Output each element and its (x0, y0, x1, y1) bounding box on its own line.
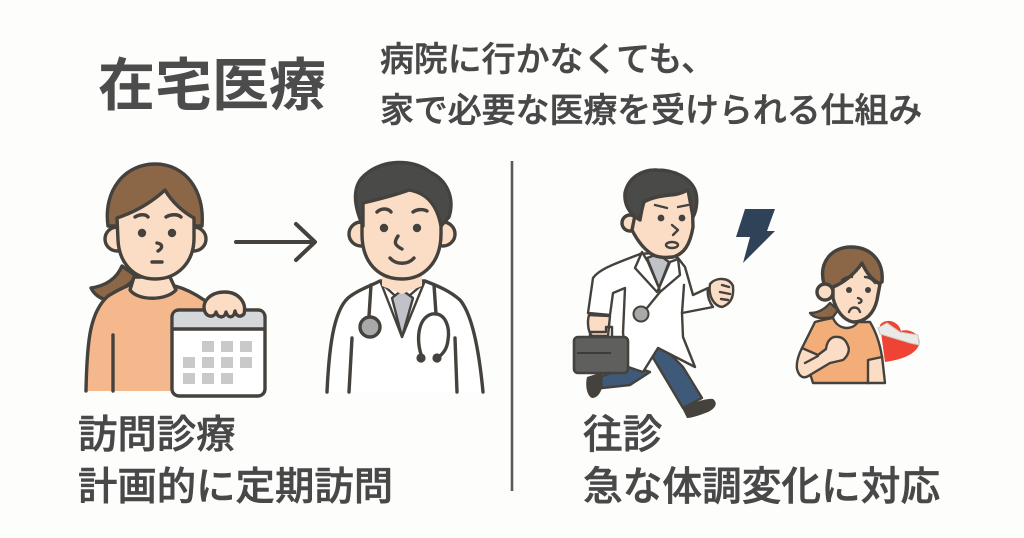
label: visit care: 計画的に定期訪問 (78, 465, 393, 509)
label: house call: 往診 (583, 413, 662, 457)
ear (817, 284, 833, 300)
hand (204, 292, 245, 317)
illustration: patient with calendar (86, 164, 265, 396)
face details (842, 277, 875, 312)
fist (710, 279, 733, 307)
right arm (867, 356, 885, 383)
ponytail (91, 266, 136, 299)
divider (511, 161, 513, 491)
neck (382, 272, 422, 294)
coat (327, 281, 483, 392)
neck (130, 277, 176, 298)
title: 在宅医療 (98, 54, 326, 118)
label: house call: 急な体調変化に対応 (583, 465, 940, 509)
face details (377, 209, 427, 249)
ears (105, 227, 129, 251)
face details (135, 215, 181, 262)
body (86, 286, 240, 391)
ponytail (810, 303, 838, 318)
face details (655, 205, 688, 235)
collar and tie (381, 283, 424, 337)
bag (574, 327, 628, 373)
stethoscope (647, 292, 660, 308)
face (833, 263, 880, 322)
front leg (652, 344, 702, 408)
tie (647, 254, 669, 288)
illustration: heart with bandage (878, 321, 919, 362)
body (802, 318, 882, 383)
hair back (823, 247, 882, 296)
illustration: doctor (327, 162, 483, 392)
arm (797, 337, 849, 377)
label: visit care: 訪問診療 (78, 413, 236, 457)
hand (588, 315, 610, 336)
hair (355, 162, 451, 226)
illustration: running doctor (574, 170, 733, 418)
hair (107, 164, 202, 226)
calendar (172, 310, 265, 396)
arrow (236, 224, 315, 260)
hair (625, 170, 697, 220)
subtitle: 病院に行かなくても、 (380, 41, 715, 79)
lapels (635, 252, 680, 292)
face (117, 190, 194, 279)
icon: lightning (736, 209, 775, 263)
face (632, 190, 693, 257)
illustration: patient holding chest (797, 247, 885, 383)
stethoscope (360, 285, 448, 363)
back leg (600, 365, 650, 388)
coat (588, 252, 713, 372)
ear (622, 215, 638, 231)
subtitle: 家で必要な医療を受けられる仕組み (380, 92, 922, 130)
ears (349, 222, 373, 246)
face (362, 182, 441, 279)
